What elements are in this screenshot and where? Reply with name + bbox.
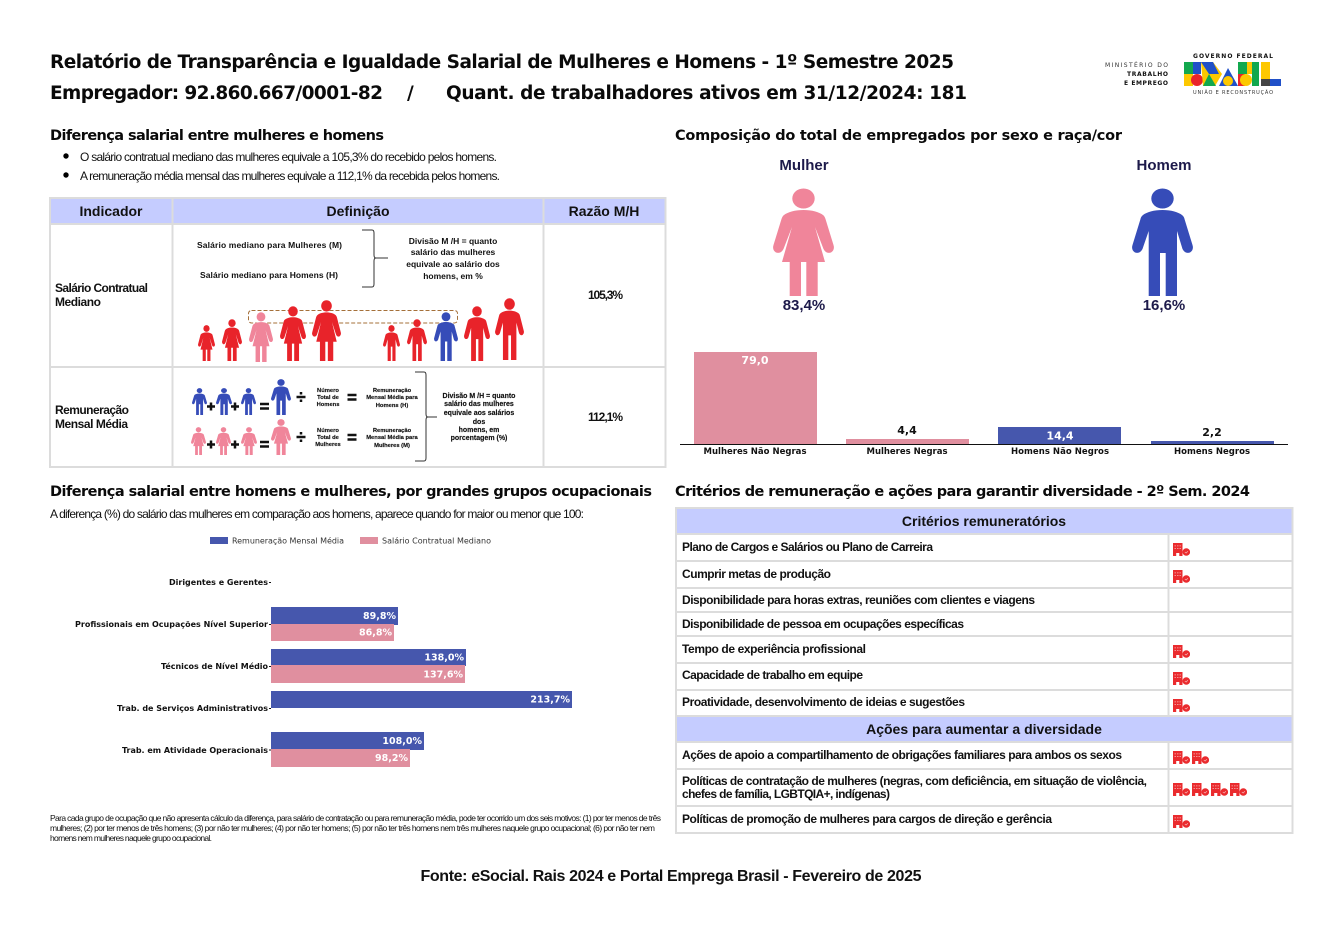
indicator table: 112,1% xyxy=(588,410,623,424)
heading: salary difference: Diferença salarial entre mulheres e homens xyxy=(50,128,384,144)
logo: Ministério do Trabalho e Emprego, Governo Federal: TRABALHO xyxy=(1127,71,1168,78)
diagram: average monthly pay: Mulheres (M) xyxy=(374,443,410,449)
diagram: contractual median salary: Salário mediano para Mulheres (M) xyxy=(197,240,342,250)
logo: Ministério do Trabalho e Emprego, Governo Federal: MINISTÉRIO DO xyxy=(1105,61,1168,69)
footnote: mulheres; (2) por ter menos de três homens; (3) por não ter mulheres; (4) por não ter homens; (5) por não ter três homens nem três mulheres naquele grupo ocupacional; (6) por não ter nem xyxy=(50,823,655,833)
indicator table: 105,3% xyxy=(588,288,623,302)
diagram: contractual median salary: equivale ao salário dos xyxy=(406,259,500,269)
legend: Remuneração Mensal Média xyxy=(232,536,344,546)
title xyxy=(50,52,967,104)
diagram: average monthly pay: homens, em xyxy=(459,427,499,434)
diagram: contractual median salary xyxy=(197,230,524,362)
indicator table: Indicador xyxy=(79,203,143,219)
indicator table: Mensal Média xyxy=(55,417,128,431)
criteria table: Capacidade de trabalho em equipe xyxy=(682,668,863,682)
criteria table: Ações para aumentar a diversidade xyxy=(866,721,1102,737)
diagram: average monthly pay: Total de xyxy=(317,395,340,401)
title: Relatório de Transparência e Igualdade Salarial de Mulheres e Homens - 1º Semestre 2025 xyxy=(50,52,954,73)
diagram: average monthly pay: salário das mulheres xyxy=(444,401,514,408)
diagram: average monthly pay: Mensal Média para xyxy=(366,435,419,441)
title: Empregador: 92.860.667/0001-82 xyxy=(50,83,383,104)
heading: composition: Composição do total de empregados por sexo e raça/cor xyxy=(675,128,1123,144)
horizontal bar chart: 138,0% xyxy=(424,652,464,664)
woman figure 83,4% xyxy=(773,157,834,314)
horizontal bar chart xyxy=(75,578,572,767)
diagram: average monthly pay xyxy=(191,372,515,461)
legend: Salário Contratual Mediano xyxy=(382,536,491,546)
bar chart: sex and race xyxy=(680,352,1288,457)
footnote xyxy=(50,813,661,843)
horizontal bar chart: Trab. de Serviços Administrativos xyxy=(117,704,268,713)
horizontal bar chart: 98,2% xyxy=(375,753,408,764)
diagram: average monthly pay: Remuneração xyxy=(373,388,412,394)
bullet list: O salário contratual mediano das mulheres equivale a 105,3% do recebido pelos homens. xyxy=(80,150,497,164)
bar chart: sex and race: Mulheres Negras xyxy=(866,447,948,457)
bar chart: sex and race: 14,4 xyxy=(1046,430,1074,442)
bar chart: sex and race: Mulheres Não Negras xyxy=(704,447,806,457)
title: Quant. de trabalhadores ativos em 31/12/2024: 181 xyxy=(446,83,967,104)
legend xyxy=(210,536,491,546)
diagram: contractual median salary: salário das mulheres xyxy=(411,247,496,257)
logo: Ministério do Trabalho e Emprego, Governo Federal xyxy=(1105,53,1281,96)
horizontal bar chart: Dirigentes e Gerentes xyxy=(169,578,268,587)
intro text: A diferença (%) do salário das mulheres em comparação aos homens, aparece quando for maior ou menor que 100: xyxy=(50,507,584,521)
woman figure 83,4%: Mulher xyxy=(779,157,829,174)
horizontal bar chart: Técnicos de Nível Médio xyxy=(161,661,268,671)
bar chart: sex and race: 2,2 xyxy=(1202,426,1222,439)
bar chart: sex and race: 79,0 xyxy=(741,354,769,367)
indicator table: Mediano xyxy=(55,295,101,309)
criteria table xyxy=(675,507,1294,834)
panel: salary difference by occupational group xyxy=(50,484,661,843)
criteria table: Cumprir metas de produção xyxy=(682,567,831,581)
footnote: homens nem mulheres naquele grupo ocupacional. xyxy=(50,833,212,843)
diagram: average monthly pay: Homens xyxy=(317,402,339,408)
diagram: average monthly pay: Divisão M /H = quanto xyxy=(443,393,515,400)
criteria table: Proatividade, desenvolvimento de ideias e sugestões xyxy=(682,695,965,709)
diagram: average monthly pay: Remuneração xyxy=(373,428,412,434)
bar chart: sex and race: Homens Não Negros xyxy=(1011,447,1109,457)
bullet list xyxy=(63,150,500,183)
title: / xyxy=(407,83,414,104)
heading: criteria: Critérios de remuneração e ações para garantir diversidade - 2º Sem. 2024 xyxy=(675,484,1250,500)
bar chart: sex and race: Homens Negros xyxy=(1174,447,1250,457)
panel: salary difference between women and men xyxy=(49,128,666,468)
horizontal bar chart: 213,7% xyxy=(530,694,570,706)
criteria table: Disponibilidade de pessoa em ocupações específicas xyxy=(682,617,964,631)
bar chart: sex and race: 4,4 xyxy=(897,424,917,437)
criteria table: chefes de família, LGBTQIA+, indígenas) xyxy=(682,787,890,801)
horizontal bar chart: 108,0% xyxy=(382,736,422,747)
diagram: average monthly pay: Número xyxy=(317,388,339,394)
logo: Ministério do Trabalho e Emprego, Governo Federal: UNIÃO E RECONSTRUÇÃO xyxy=(1193,89,1273,96)
source line: Fonte: eSocial. Rais 2024 e Portal Emprega Brasil - Fevereiro de 2025 xyxy=(420,868,922,885)
horizontal bar chart: Profissionais em Ocupações Nível Superior xyxy=(75,620,268,629)
horizontal bar chart: 86,8% xyxy=(359,628,392,638)
criteria table: Tempo de experiência profissional xyxy=(682,642,866,656)
diagram: average monthly pay: dos xyxy=(473,419,485,426)
diagram: average monthly pay: Mulheres xyxy=(315,442,341,448)
icons: company markers xyxy=(1173,543,1247,828)
criteria table: Critérios remuneratórios xyxy=(902,513,1066,529)
indicator table: Definição xyxy=(326,203,390,219)
diagram: average monthly pay: Total de xyxy=(317,435,340,441)
diagram: average monthly pay: equivale aos salários xyxy=(444,410,514,417)
criteria table: Plano de Cargos e Salários ou Plano de Carreira xyxy=(682,540,933,554)
footnote: Para cada grupo de ocupação que não apresenta cálculo da diferença, para salário de contratação ou para remuneração média, pode ter ocorrido um dos seis motivos: (1) por ter menos de três xyxy=(50,813,661,823)
diagram: contractual median salary: homens, em % xyxy=(423,271,483,281)
bullet list: A remuneração média mensal das mulheres equivale a 112,1% da recebida pelos homens. xyxy=(80,169,500,183)
logo: Ministério do Trabalho e Emprego, Governo Federal: GOVERNO FEDERAL xyxy=(1193,53,1273,60)
criteria table: Disponibilidade para horas extras, reuniões com clientes e viagens xyxy=(682,593,1035,607)
indicator table: Remuneração xyxy=(55,403,129,417)
indicator table: Razão M/H xyxy=(569,203,639,219)
horizontal bar chart: Trab. em Atividade Operacionais xyxy=(122,746,268,755)
woman figure 83,4%: 83,4% xyxy=(783,297,825,314)
criteria table: Políticas de contratação de mulheres (negras, com deficiência, em situação de violência, xyxy=(682,774,1147,788)
criteria table: Políticas de promoção de mulheres para cargos de direção e gerência xyxy=(682,812,1052,826)
logo: Ministério do Trabalho e Emprego, Governo Federal: E EMPREGO xyxy=(1124,80,1168,87)
man figure 16,6% xyxy=(1132,157,1193,314)
indicator table: Salário Contratual xyxy=(55,281,148,295)
panel: workforce composition xyxy=(675,128,1288,457)
diagram: average monthly pay: Mensal Média para xyxy=(366,395,419,401)
diagram: contractual median salary: Salário mediano para Homens (H) xyxy=(200,270,338,280)
diagram: average monthly pay: porcentagem (%) xyxy=(451,435,507,442)
indicator table xyxy=(49,197,666,468)
man figure 16,6%: Homem xyxy=(1136,157,1192,174)
diagram: average monthly pay: Número xyxy=(317,428,339,434)
man figure 16,6%: 16,6% xyxy=(1143,297,1185,314)
horizontal bar chart: 89,8% xyxy=(363,611,396,622)
diagram: contractual median salary: Divisão M /H = quanto xyxy=(409,236,497,246)
criteria table: Ações de apoio a compartilhamento de obrigações familiares para ambos os sexos xyxy=(682,748,1122,762)
heading: occupational groups: Diferença salarial entre homens e mulheres, por grandes grupos ocupacionais xyxy=(50,484,652,500)
panel: remuneration criteria and diversity actions xyxy=(675,484,1294,834)
diagram: average monthly pay: Homens (H) xyxy=(376,403,408,409)
horizontal bar chart: 137,6% xyxy=(423,670,463,680)
